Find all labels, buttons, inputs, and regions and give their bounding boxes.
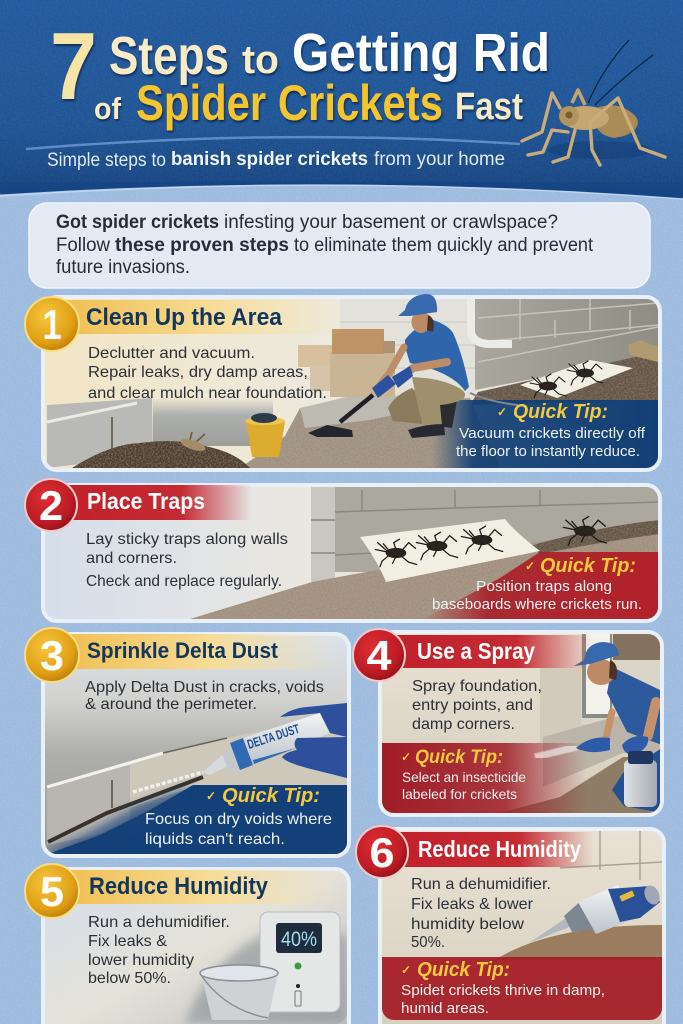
title: of: [94, 91, 122, 126]
illustration: dust applicator: [45, 703, 347, 855]
tip background: [432, 400, 660, 470]
intro text: to eliminate them quickly and prevent: [294, 235, 594, 256]
tip background: [45, 785, 347, 855]
body text: lower humidity: [88, 952, 194, 969]
body text: Apply Delta Dust in cracks, voids: [85, 679, 324, 696]
intro text: Follow: [56, 235, 110, 256]
body text: damp corners.: [412, 716, 515, 733]
title: to: [242, 38, 279, 82]
intro text: [56, 212, 594, 278]
quick tip: ✓: [525, 559, 535, 573]
quick tip: [401, 747, 526, 802]
icon: spider cricket: [522, 40, 665, 165]
quick tip: ✓: [401, 963, 411, 977]
panel: step 6 humidity: [356, 826, 664, 1024]
intro text: these proven steps: [115, 235, 289, 256]
body text: Repair leaks, dry damp areas,: [88, 364, 308, 381]
tool: [529, 883, 662, 943]
body text: [411, 876, 551, 951]
subtitle: Simple steps to: [47, 150, 166, 171]
intro text: infesting your basement or crawlspace?: [224, 212, 558, 233]
heading ribbon: [52, 634, 342, 669]
heading: Clean Up the Area: [86, 304, 283, 331]
spray mist: [535, 747, 577, 757]
quick tip: liquids can't reach.: [145, 831, 285, 848]
body text: [412, 678, 542, 733]
intro text: Got spider crickets: [56, 212, 219, 233]
dehumidifier: 40%: [281, 928, 317, 951]
illustration: wall, window and worker spraying: [382, 634, 662, 813]
quick tip: Spidet crickets thrive in damp,: [401, 982, 605, 999]
badge 2: 2: [39, 482, 63, 529]
quick tip: Quick Tip:: [513, 401, 608, 423]
gloved hand: [280, 703, 347, 778]
body text: [88, 345, 327, 402]
badge 5: 5: [40, 868, 64, 915]
badge 6: [356, 826, 408, 878]
quick tip: Quick Tip:: [417, 959, 510, 981]
quick tip: [401, 959, 605, 1017]
badge 3: [25, 628, 79, 682]
body text: [88, 914, 230, 987]
body text: Fix leaks &: [88, 933, 167, 950]
tip background: [382, 743, 587, 813]
dehumidifier: [260, 912, 340, 1012]
worker: [574, 642, 662, 813]
panel: step 5 humidity: [25, 864, 349, 1024]
subtitle: [47, 149, 505, 171]
body text: Fix leaks & lower: [411, 896, 534, 913]
body text: [86, 531, 288, 590]
quick tip: Quick Tip:: [222, 785, 320, 807]
title: 7: [50, 13, 97, 120]
subtitle: banish spider crickets: [171, 149, 368, 170]
body text: Lay sticky traps along walls: [86, 531, 288, 548]
hose: [470, 393, 518, 405]
body text: humidity below: [411, 916, 524, 933]
title: Getting Rid: [292, 23, 550, 83]
badge 6: 6: [370, 829, 394, 876]
quick tip: humid areas.: [401, 1000, 489, 1017]
body text: & around the perimeter.: [85, 696, 257, 713]
quick tip: Position traps along: [476, 578, 612, 595]
body text: Declutter and vacuum.: [88, 345, 255, 362]
bucket: [200, 965, 278, 1020]
quick tip: [456, 401, 646, 460]
subtitle: from your home: [374, 149, 505, 170]
illustration: caulk tool on wall: [382, 831, 662, 1023]
heading: Place Traps: [87, 488, 205, 514]
log: [628, 340, 658, 362]
vacuum: [308, 395, 373, 437]
body text: and clear mulch near foundation.: [88, 385, 327, 402]
illustration: wall and trap: [190, 487, 660, 621]
title: Fast: [455, 86, 523, 128]
illustration: basement scene: [47, 299, 660, 470]
tip background: [382, 957, 662, 1023]
heading: Use a Spray: [417, 638, 535, 664]
quick tip: Quick Tip:: [415, 747, 503, 768]
heading ribbon: [382, 832, 594, 867]
heading: Sprinkle Delta Dust: [87, 638, 279, 663]
quick tip: [432, 555, 642, 613]
quick tip: ✓: [497, 405, 507, 419]
body text: 50%.: [411, 934, 445, 951]
badge 1: 1: [42, 301, 62, 348]
panel: step 1 clean up: [25, 294, 660, 470]
illustration: dehumidifier and bucket: [185, 912, 347, 1024]
body text: and corners.: [86, 550, 177, 567]
heading: Reduce Humidity: [89, 873, 269, 900]
quick tip: Select an insecticide: [402, 769, 526, 785]
intro panel: [29, 203, 650, 288]
badge 4: 4: [366, 632, 392, 679]
title: Spider Crickets: [136, 75, 443, 131]
tube: DELTA DUST: [245, 721, 301, 752]
sprayer tank: [624, 751, 657, 807]
header banner: [0, 0, 683, 199]
downspout: [471, 299, 512, 344]
body text: [85, 679, 324, 713]
heading: Reduce Humidity: [418, 836, 581, 862]
bucket: [245, 413, 285, 457]
panel: step 4 spray: [353, 629, 662, 815]
heading ribbon: [52, 485, 252, 520]
heading ribbon: [379, 635, 592, 668]
worker: [372, 294, 469, 438]
intro text: future invasions.: [56, 257, 190, 278]
badge 3: 3: [40, 632, 64, 679]
body text: below 50%.: [88, 970, 171, 987]
quick tip: Focus on dry voids where: [145, 811, 332, 828]
title: [50, 13, 550, 131]
badge 1: [25, 297, 79, 351]
heading ribbon: [52, 300, 347, 334]
quick tip: labeled for crickets: [402, 786, 517, 802]
body text: entry points, and: [412, 697, 533, 714]
panel: step 3 delta dust: [25, 628, 349, 856]
quick tip: ✓: [401, 750, 411, 764]
tube: [203, 713, 330, 775]
quick tip: baseboards where crickets run.: [432, 596, 642, 613]
cricket on ground: [175, 432, 207, 453]
quick tip: [145, 785, 332, 848]
sticky trap: [360, 519, 540, 582]
cardboard boxes: [298, 329, 395, 397]
title: Steps: [109, 26, 229, 86]
quick tip: Vacuum crickets directly off: [459, 425, 646, 442]
badge 4: [353, 629, 405, 681]
body text: Check and replace regularly.: [86, 573, 282, 590]
badge 2: [25, 479, 77, 531]
body text: Run a dehumidifier.: [411, 876, 551, 893]
body text: Run a dehumidifier.: [88, 914, 230, 931]
badge 5: [25, 864, 79, 918]
tip background: [420, 552, 660, 621]
heading ribbon: [52, 870, 342, 904]
quick tip: ✓: [206, 789, 216, 803]
body text: Spray foundation,: [412, 678, 542, 695]
quick tip: Quick Tip:: [540, 555, 636, 577]
sticky trap: [520, 360, 633, 398]
panel: step 2 place traps: [25, 479, 660, 621]
quick tip: the floor to instantly reduce.: [456, 443, 640, 460]
